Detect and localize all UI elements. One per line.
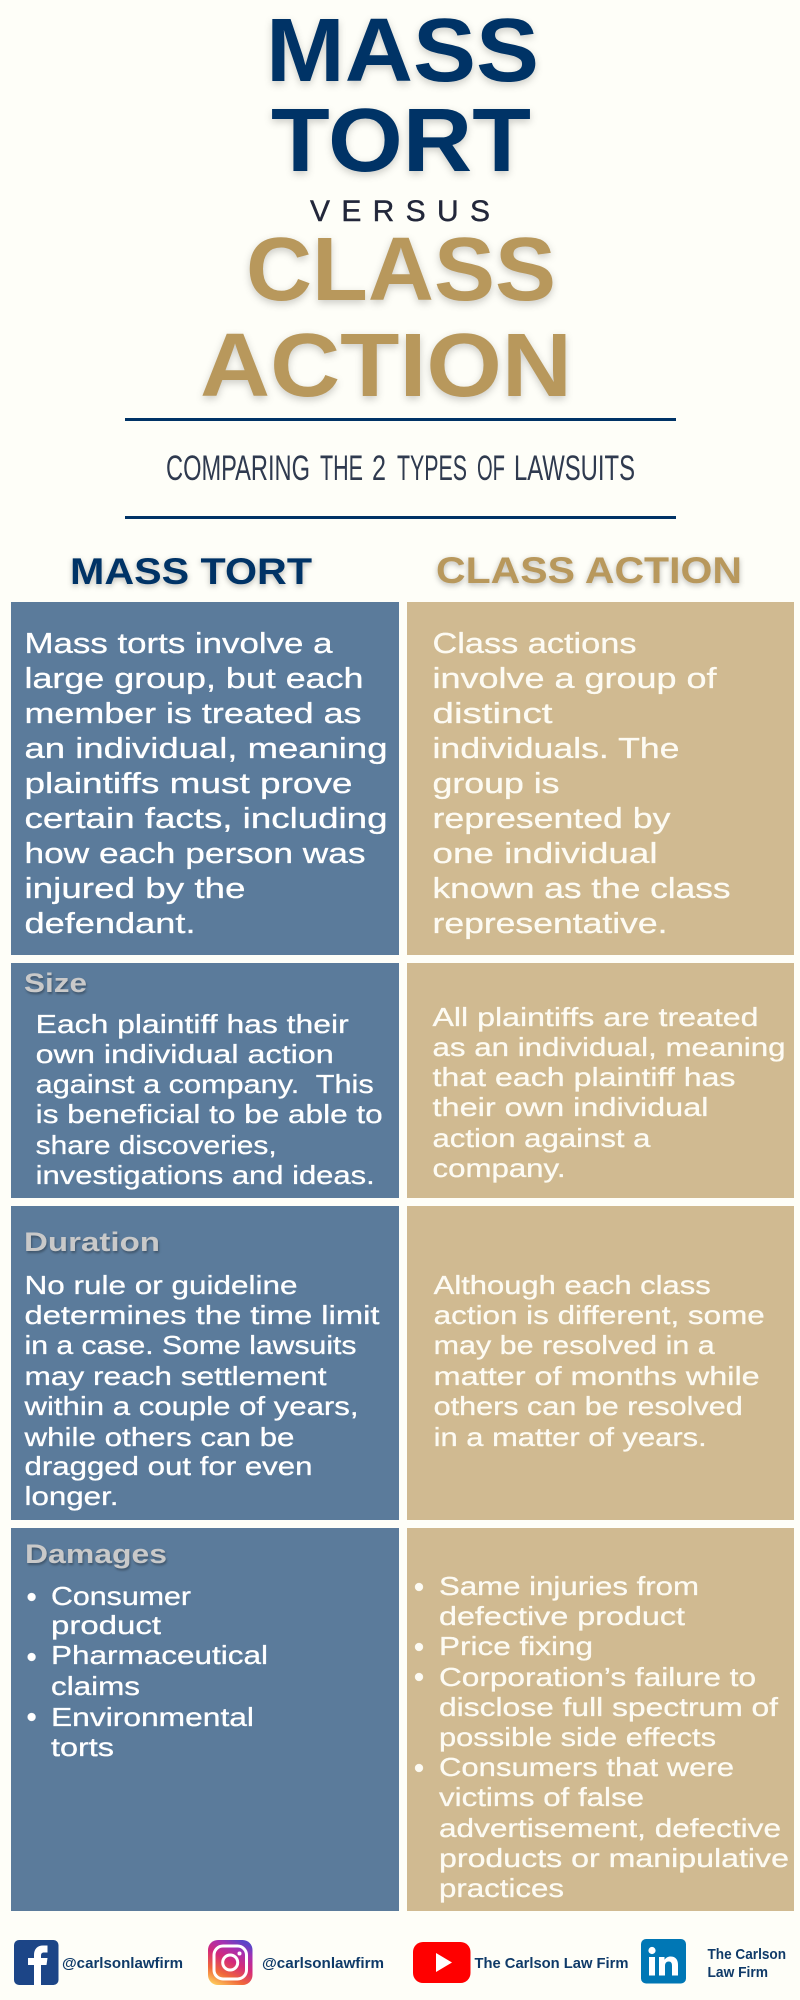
text block: duration, class action: matter of months while [434, 1361, 760, 1391]
list: damages, class action: advertisement, defective [439, 1813, 781, 1843]
text block: size, mass tort: Each plaintiff has their [36, 1009, 349, 1039]
text block: duration, class action: in a matter of years. [434, 1422, 707, 1452]
column heading: class action: CLASS ACTION [436, 550, 742, 591]
list: damages, mass tort [28, 1581, 268, 1762]
text block: mass tort definition: member is treated as [24, 698, 362, 730]
subtitle [166, 449, 635, 488]
text block: class action definition: distinct [432, 698, 552, 730]
text block: mass tort definition: injured by the [24, 873, 246, 905]
subtitle: LAWSUITS [514, 449, 635, 488]
text block: size, mass tort [36, 1009, 383, 1190]
text block: size, class action: as an individual, meaning [432, 1032, 786, 1062]
heading: duration: Duration [24, 1227, 160, 1257]
text block: duration, mass tort: while others can be [23, 1422, 295, 1452]
list: damages, mass tort: Environmental [51, 1702, 254, 1732]
text block: duration, class action: others can be resolved [434, 1391, 743, 1421]
list: damages, mass tort: Consumer [51, 1581, 191, 1611]
list: damages, class action: Consumers that were [439, 1752, 734, 1782]
facebook handle: @carlsonlawfirm [62, 1955, 183, 1972]
text block: duration, mass tort: longer. [24, 1481, 118, 1511]
heading: damages: Damages [25, 1539, 167, 1569]
list: damages, class action: defective product [439, 1601, 686, 1631]
list: damages, class action: practices [439, 1873, 564, 1903]
list: damages, class action: victims of false [439, 1782, 644, 1812]
panel: duration, mass tort [11, 1206, 399, 1520]
text block: class action definition [432, 628, 730, 940]
list: damages, class action: possible side effects [439, 1722, 716, 1752]
title: mass tort: TORT [271, 91, 531, 191]
text block: class action definition: Class actions [432, 628, 636, 660]
text block: size, class action: All plaintiffs are treated [432, 1002, 758, 1032]
text block: duration, mass tort: in a case. Some lawsuits [24, 1330, 356, 1360]
text block: mass tort definition: an individual, meaning [24, 733, 388, 765]
instagram handle: @carlsonlawfirm [262, 1955, 384, 1972]
text block: class action definition: group is [432, 768, 560, 800]
title: class action: CLASS [246, 220, 556, 320]
text block: duration, class action: may be resolved in a [434, 1330, 715, 1360]
icon: facebook [14, 1940, 58, 1985]
text block: class action definition: known as the class [432, 873, 730, 905]
text block: duration, class action: Although each class [434, 1270, 711, 1300]
panel: size, class action [407, 963, 794, 1198]
text block: duration, mass tort: dragged out for even [24, 1451, 312, 1481]
list: damages, mass tort: Pharmaceutical [51, 1640, 268, 1670]
text block: duration, mass tort [23, 1270, 380, 1511]
linkedin name: The Carlson [708, 1946, 786, 1963]
panel: damages, mass tort [11, 1528, 399, 1911]
text block: size, class action: action against a [432, 1123, 651, 1153]
text block: duration, mass tort: determines the time limit [24, 1300, 380, 1330]
panel: size, mass tort [11, 963, 399, 1198]
subtitle: 2 [372, 449, 386, 488]
title: mass tort [266, 1, 539, 191]
text block: size, class action [432, 1002, 786, 1183]
linkedin name: Law Firm [708, 1964, 768, 1981]
icon: linkedin [641, 1939, 686, 1984]
text block: size, mass tort: is beneficial to be able to [36, 1099, 383, 1129]
list: damages, class action: Corporation’s failure to [439, 1662, 756, 1692]
text block: class action definition: represented by [432, 803, 671, 835]
text block: size, mass tort: own individual action [36, 1039, 334, 1069]
list: damages, mass tort: claims [51, 1671, 140, 1701]
panel: duration, class action [407, 1206, 794, 1520]
text block: mass tort definition [24, 628, 388, 940]
title: class action [200, 220, 572, 416]
panel: class action definition [407, 602, 794, 955]
text block: class action definition: individuals. The [432, 733, 680, 765]
text block: size, class action: company. [432, 1153, 566, 1183]
title: versus: VERSUS [310, 195, 490, 228]
youtube name: The Carlson Law Firm [474, 1955, 628, 1972]
list: damages, class action [415, 1571, 789, 1903]
subtitle: TYPES [397, 449, 467, 488]
icon: instagram [208, 1940, 252, 1985]
text block: size, mass tort: share discoveries, [36, 1130, 277, 1160]
text block: size, class action: their own individual [432, 1092, 708, 1122]
title [200, 1, 572, 416]
subtitle: THE [320, 449, 363, 488]
text block: size, mass tort: investigations and ideas. [36, 1160, 375, 1190]
list: damages, mass tort: torts [51, 1732, 114, 1762]
text block: mass tort definition: large group, but each [24, 663, 364, 695]
title: mass tort: MASS [266, 1, 539, 101]
title: class action: ACTION [200, 316, 572, 416]
list: damages, class action: products or manipulative [439, 1843, 789, 1873]
text block: size, mass tort: against a company. This [36, 1069, 374, 1099]
subtitle: COMPARING [166, 449, 310, 488]
text block: mass tort definition: Mass torts involve a [24, 628, 334, 660]
list: damages, mass tort: product [51, 1610, 162, 1640]
text block: duration, mass tort: No rule or guideline [24, 1270, 298, 1300]
subtitle: OF [477, 449, 505, 488]
text block: mass tort definition: defendant. [24, 908, 196, 940]
text block: mass tort definition: certain facts, including [24, 803, 388, 835]
text block: size, class action: that each plaintiff has [432, 1062, 736, 1092]
text block: mass tort definition: plaintiffs must prove [24, 768, 352, 800]
list: damages, class action: Price fixing [439, 1631, 593, 1661]
text block: class action definition: one individual [432, 838, 658, 870]
text block: class action definition: representative. [432, 908, 668, 940]
heading: size: Size [24, 968, 87, 998]
linkedin name [708, 1946, 786, 1981]
footer: social links [14, 1939, 786, 1985]
text block: duration, class action: action is different, some [434, 1300, 765, 1330]
text block: class action definition: involve a group of [432, 663, 718, 695]
icon: youtube [413, 1942, 470, 1983]
text block: duration, mass tort: within a couple of years, [23, 1391, 358, 1421]
panel: damages, class action [407, 1528, 794, 1911]
list: damages, class action: Same injuries from [439, 1571, 699, 1601]
column heading: mass tort: MASS TORT [70, 551, 312, 592]
text block: duration, class action [434, 1270, 765, 1452]
text block: duration, mass tort: may reach settlement [24, 1361, 327, 1391]
panel: mass tort definition [11, 602, 399, 955]
text block: mass tort definition: how each person was [24, 838, 366, 870]
list: damages, class action: disclose full spectrum of [439, 1692, 779, 1722]
